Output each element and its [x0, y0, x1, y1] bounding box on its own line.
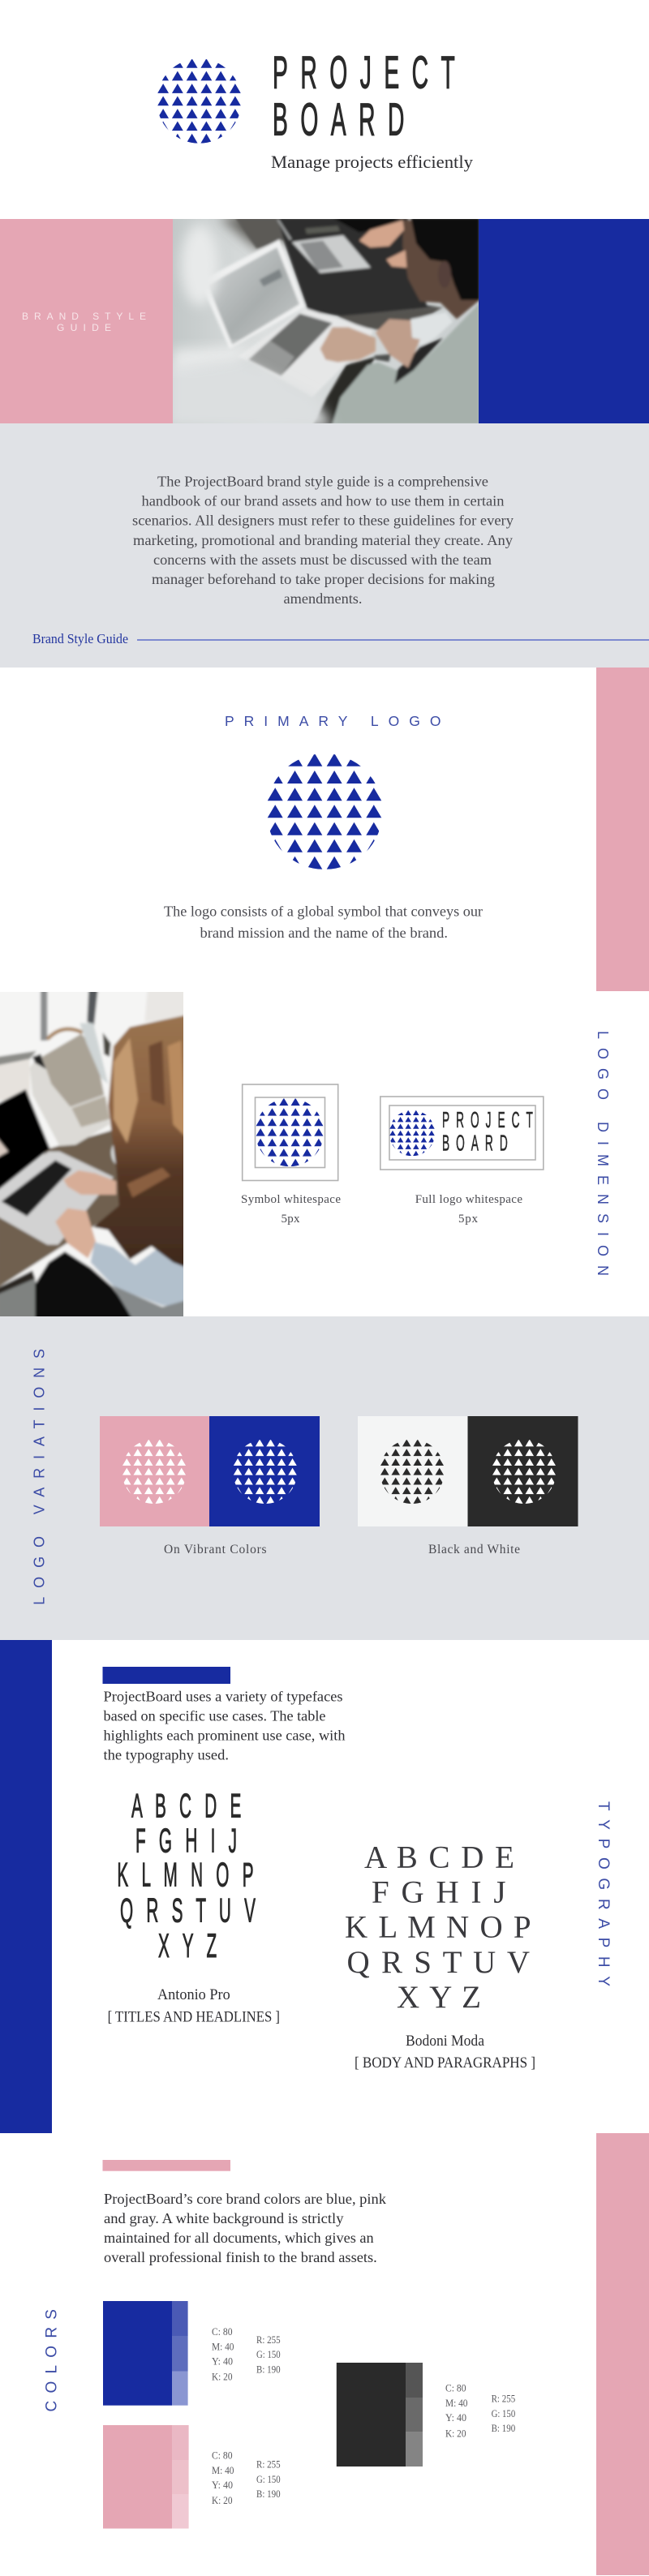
icon: triangle globe logo [157, 58, 241, 143]
intro paragraph: The ProjectBoard brand style guide is a comprehensive [157, 474, 488, 490]
diagram: full logo whitespace: PROJECT [442, 1107, 539, 1132]
values: black rgb [492, 2393, 515, 2434]
caption: full logo whitespace: 5px [458, 1213, 479, 1226]
logo description: brand mission and the name of the brand. [200, 925, 448, 941]
panel: pink brand style guide block: BRAND STYLE [22, 311, 146, 322]
colors paragraph: maintained for all documents, which gives an [104, 2230, 374, 2246]
typography paragraph: highlights each prominent use case, with [104, 1728, 346, 1744]
pink title bar [102, 2160, 230, 2171]
tile: logo on pink [100, 1416, 209, 1526]
panel: logo dimension [0, 990, 611, 1319]
values: blue cmyk: Y: 40 [212, 2355, 233, 2367]
diagram: full logo whitespace: BOARD [442, 1130, 514, 1156]
values: pink rgb [256, 2459, 281, 2500]
typography paragraph: ProjectBoard uses a variety of typefaces [104, 1689, 342, 1705]
intro paragraph: handbook of our brand assets and how to use them in certain [141, 493, 505, 509]
swatch: blue [103, 2301, 188, 2406]
caption: symbol whitespace [241, 1193, 341, 1226]
intro paragraph [132, 474, 514, 607]
panel: logo variations [0, 1316, 649, 1640]
title: project board: PROJECT [273, 48, 467, 98]
values: pink rgb: R: 255 [256, 2459, 281, 2471]
panel: blue block [479, 219, 649, 423]
values: black rgb: G: 150 [492, 2408, 515, 2419]
values: black cmyk: C: 80 [445, 2383, 466, 2394]
panel: pink brand style guide block [0, 219, 173, 423]
values: black cmyk: K: 20 [445, 2428, 466, 2439]
caption: antonio pro [108, 1986, 280, 2026]
tile: logo on white [358, 1416, 467, 1526]
values: blue cmyk: C: 80 [212, 2326, 232, 2338]
section marker: brand style guide: Brand Style Guide [32, 631, 128, 646]
specimen: bodoni alphabet: A B C D E [364, 1840, 514, 1874]
heading: primary logo: PRIMARY LOGO [225, 713, 441, 729]
caption: bodoni moda: [ BODY AND PARAGRAPHS ] [355, 2054, 535, 2072]
diagram: full logo whitespace [380, 1097, 544, 1170]
photo: man working on laptop [167, 217, 479, 427]
caption: symbol whitespace: Symbol whitespace [241, 1193, 341, 1206]
specimen: antonio alphabet: K L M N O P [117, 1856, 258, 1894]
values: blue rgb [256, 2334, 281, 2376]
values: blue cmyk: M: 40 [212, 2341, 234, 2352]
blue title bar [102, 1667, 230, 1684]
typography paragraph [104, 1689, 346, 1762]
specimen: antonio alphabet: F G H I J [135, 1821, 241, 1859]
values: pink rgb: B: 190 [256, 2488, 281, 2500]
intro paragraph: marketing, promotional and branding material they create. Any [133, 532, 513, 548]
specimen: bodoni alphabet: K L M N O P [345, 1909, 531, 1945]
intro paragraph: concerns with the assets must be discussed with the team [153, 552, 492, 568]
colors paragraph: and gray. A white background is strictly [104, 2210, 344, 2226]
specimen: bodoni alphabet: X Y Z [397, 1980, 481, 2015]
values: blue cmyk: K: 20 [212, 2372, 232, 2383]
caption: antonio pro: Antonio Pro [157, 1986, 230, 2003]
values: pink cmyk: Y: 40 [212, 2479, 233, 2491]
values: black cmyk: M: 40 [445, 2398, 467, 2409]
pink side bar [596, 668, 649, 991]
specimen: antonio alphabet: X Y Z [158, 1926, 221, 1964]
intro paragraph: scenarios. All designers must refer to these guidelines for every [132, 513, 514, 529]
diagram: symbol whitespace [243, 1084, 338, 1181]
vertical heading: colors: COLORS [43, 2309, 60, 2412]
swatch: black [337, 2363, 423, 2467]
panel: typography [0, 1640, 612, 2133]
blue side bar [0, 1640, 52, 2133]
logo description: The logo consists of a global symbol that conveys our [164, 903, 483, 919]
panel: pink brand style guide block: GUIDE [57, 322, 111, 333]
tile: logo on blue [209, 1416, 320, 1526]
header: logo and title [157, 48, 473, 172]
specimen: antonio alphabet: Q R S T U V [120, 1891, 260, 1929]
values: blue rgb: G: 150 [256, 2349, 281, 2360]
caption: bodoni moda: Bodoni Moda [406, 2033, 485, 2050]
photo: woman on laptop [0, 990, 187, 1319]
logo description [164, 903, 483, 941]
values: pink cmyk: K: 20 [212, 2495, 232, 2506]
title: project board [273, 48, 467, 145]
vertical heading: logo dimension: LOGO DIMENSION [595, 1031, 611, 1276]
specimen: antonio alphabet [117, 1787, 260, 1964]
values: black cmyk [445, 2383, 467, 2439]
intro paragraph: manager beforehand to take proper decisions for making [152, 571, 495, 587]
pink side bar [596, 2133, 649, 2575]
intro paragraph: amendments. [284, 590, 362, 607]
caption: antonio pro: [ TITLES AND HEADLINES ] [108, 2009, 280, 2026]
vertical heading: typography: TYPOGRAPHY [595, 1801, 612, 1986]
specimen: bodoni alphabet [345, 1840, 531, 2015]
tile: logo on black [467, 1416, 578, 1526]
values: black rgb: R: 255 [492, 2393, 515, 2404]
values: pink cmyk: C: 80 [212, 2450, 232, 2462]
typography paragraph: the typography used. [104, 1746, 229, 1762]
typography paragraph: based on specific use cases. The table [104, 1707, 326, 1724]
caption: full logo whitespace: Full logo whitespace [415, 1193, 522, 1206]
specimen: antonio alphabet: A B C D E [131, 1787, 246, 1824]
values: black cmyk: Y: 40 [445, 2412, 466, 2424]
hero band [0, 217, 649, 427]
caption: bodoni moda [355, 2033, 535, 2072]
title: project board: BOARD [273, 95, 417, 145]
swatch: pink [103, 2425, 189, 2529]
specimen: bodoni alphabet: F G H I J [372, 1874, 506, 1909]
colors paragraph: overall professional finish to the brand assets. [104, 2249, 377, 2265]
panel: colors [43, 2133, 649, 2575]
values: pink cmyk [212, 2450, 234, 2506]
values: pink cmyk: M: 40 [212, 2465, 234, 2476]
vertical heading: logo variations: LOGO VARIATIONS [32, 1349, 48, 1605]
values: blue cmyk [212, 2326, 234, 2383]
caption: symbol whitespace: 5px [281, 1213, 300, 1226]
values: blue rgb: B: 190 [256, 2364, 281, 2376]
caption: on vibrant colors: On Vibrant Colors [164, 1543, 267, 1556]
colors paragraph [104, 2191, 386, 2265]
icon: primary logo symbol [268, 753, 381, 869]
panel: primary logo [164, 668, 649, 991]
caption: full logo whitespace [415, 1193, 522, 1226]
specimen: bodoni alphabet: Q R S T U V [347, 1945, 530, 1980]
values: blue rgb: R: 255 [256, 2334, 281, 2346]
colors paragraph: ProjectBoard’s core brand colors are blue, pink [104, 2191, 386, 2207]
values: pink rgb: G: 150 [256, 2474, 281, 2485]
values: black rgb: B: 190 [492, 2423, 515, 2434]
panel: introduction [0, 423, 649, 668]
tagline: Manage projects efficiently [271, 152, 473, 172]
caption: black and white: Black and White [428, 1543, 520, 1556]
